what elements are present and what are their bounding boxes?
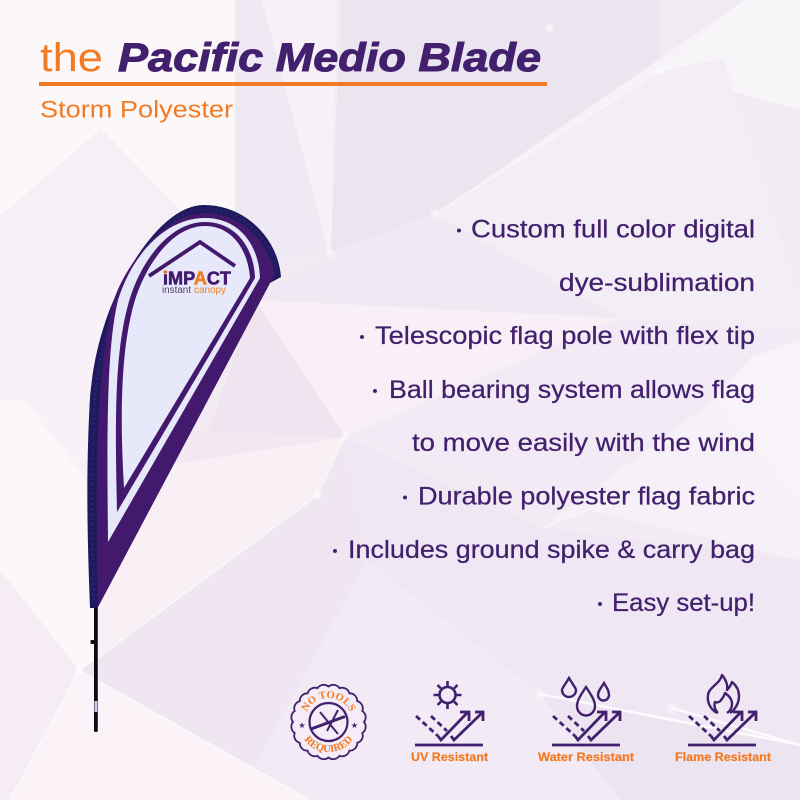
title: Pacific Medio Blade <box>118 36 541 80</box>
icon: water resistant: Water Resistant <box>538 752 634 764</box>
feature list: Ball bearing system allows flag <box>389 376 755 404</box>
icon: water resistant <box>538 678 634 764</box>
feature list <box>333 216 755 617</box>
feature list: Telescopic flag pole with flex tip <box>375 322 755 350</box>
feature list: to move easily with the wind <box>412 429 755 457</box>
logo: impact instant canopy: iMPACT <box>163 268 232 288</box>
no tools required badge <box>290 684 367 760</box>
no tools required badge: ★ <box>351 721 358 730</box>
logo: impact instant canopy: canopy <box>194 285 226 296</box>
feature list: Easy set-up! <box>612 589 755 617</box>
no tools required badge: NO TOOLS <box>301 691 356 712</box>
logo: impact instant canopy <box>149 242 235 296</box>
feature list: dye-sublimation <box>559 269 755 297</box>
flag pole <box>90 606 98 732</box>
feature list: Durable polyester flag fabric <box>418 482 755 510</box>
title: the <box>40 36 103 80</box>
subtitle: Storm Polyester <box>40 96 233 124</box>
icon: flame resistant <box>675 675 771 764</box>
icon: uv resistant <box>411 681 488 764</box>
feature list: Custom full color digital <box>471 216 755 244</box>
teardrop flag <box>87 205 281 608</box>
icon: flame resistant: Flame Resistant <box>675 752 771 764</box>
feature list: Includes ground spike & carry bag <box>348 536 755 564</box>
no tools required badge: ★ <box>298 721 306 730</box>
icon: uv resistant: UV Resistant <box>411 752 488 764</box>
no tools required badge: REQUIRED <box>304 735 352 753</box>
title underline <box>39 82 547 86</box>
logo: impact instant canopy: instant <box>162 285 191 296</box>
